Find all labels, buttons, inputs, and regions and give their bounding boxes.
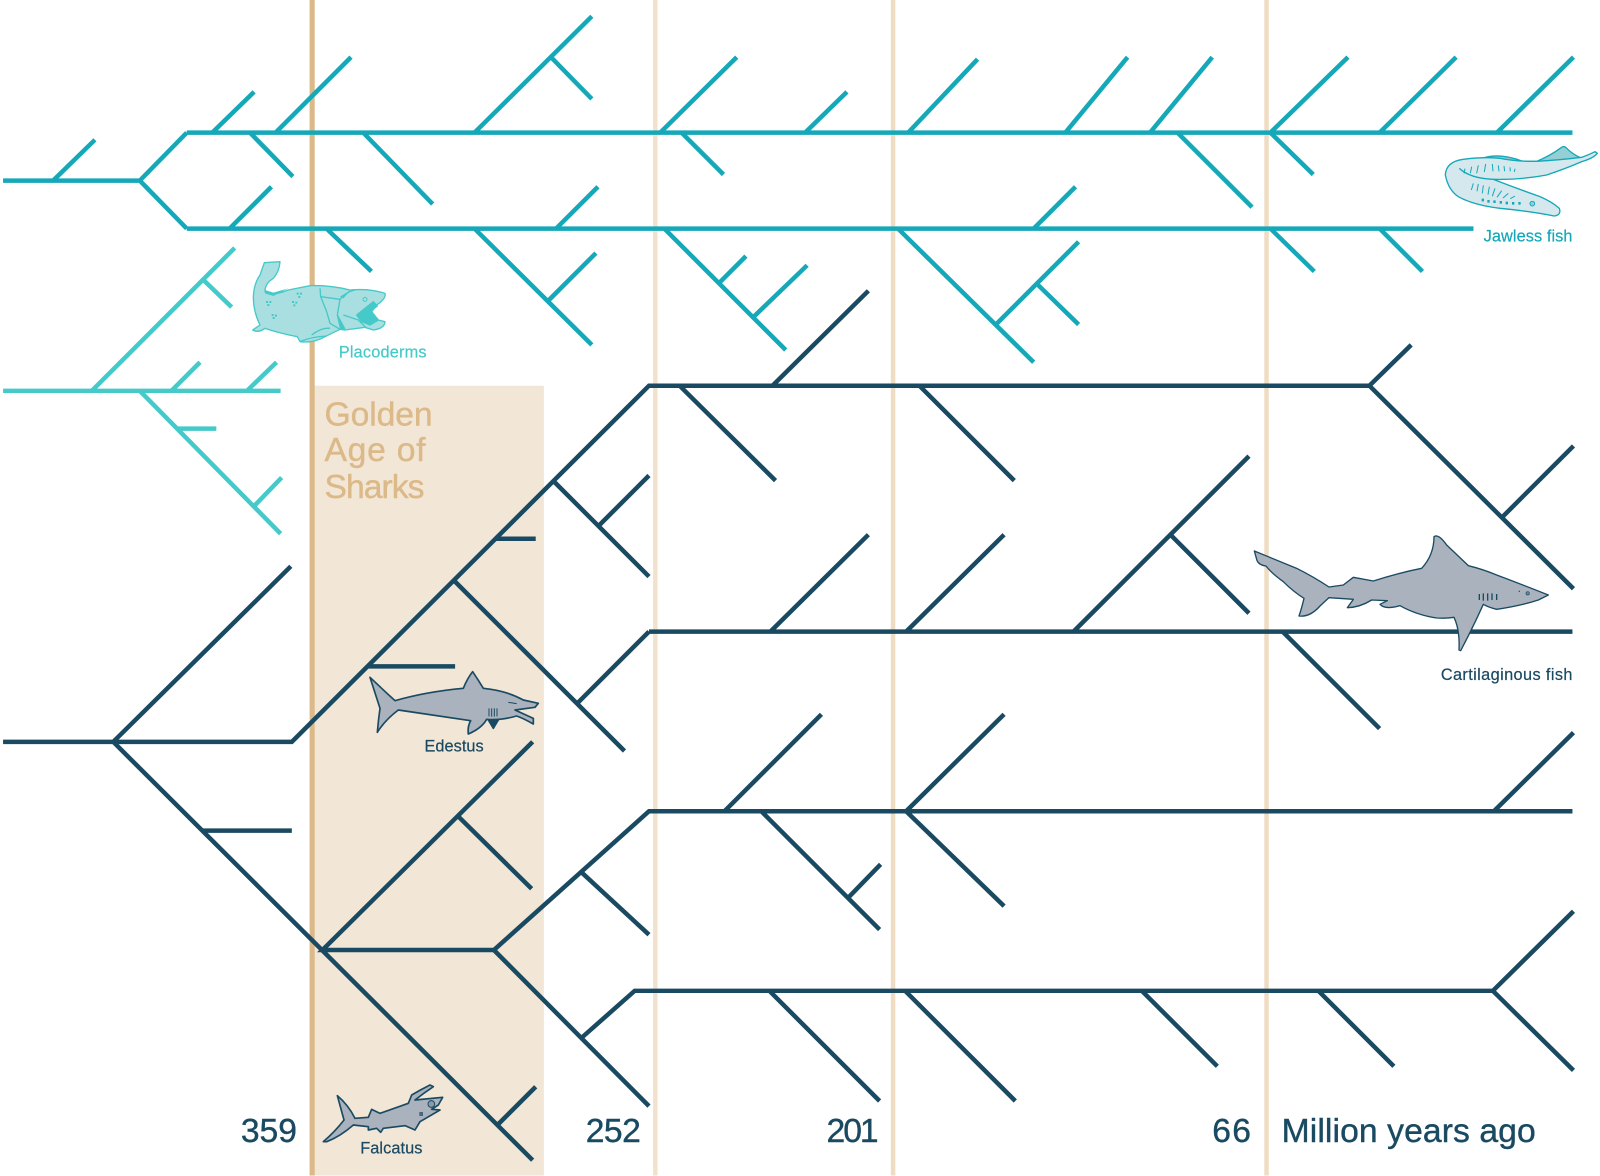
timeline labels xyxy=(241,1113,1536,1150)
species labels: Jawless fish xyxy=(1484,227,1572,245)
tree: placoderm lineage xyxy=(3,248,282,534)
tree: cartilaginous fish lineage xyxy=(3,291,1573,1160)
timeline labels: Million years ago xyxy=(1282,1113,1536,1150)
heading: Golden Age of Sharks: Sharks xyxy=(324,469,424,506)
icon: lamprey (jawless fish) xyxy=(1445,147,1597,216)
species labels xyxy=(339,227,1572,1158)
time marker: 201 million years xyxy=(891,0,895,1176)
heading: Golden Age of Sharks: Golden xyxy=(324,397,433,434)
heading: Golden Age of Sharks: Age of xyxy=(324,432,426,469)
time marker: 252 million years xyxy=(653,0,658,1176)
species labels: Edestus xyxy=(424,738,484,756)
time marker: 66 million years xyxy=(1264,0,1269,1176)
timeline labels: 252 xyxy=(586,1113,641,1150)
icon: Edestus shark xyxy=(370,672,538,734)
timeline labels: 359 xyxy=(241,1113,297,1150)
time marker: 359 million years xyxy=(310,0,315,1176)
icon: Falcatus shark xyxy=(323,1085,443,1142)
heading: Golden Age of Sharks xyxy=(324,397,433,506)
timeline labels: 66 xyxy=(1212,1113,1251,1150)
species labels: Placoderms xyxy=(339,344,427,362)
panel: golden age of sharks band xyxy=(312,386,544,1176)
tree: jawless fish lineage xyxy=(3,16,1573,362)
icon: modern shark (cartilaginous fish) xyxy=(1254,536,1548,651)
icon: placoderm (Dunkleosteus) xyxy=(253,262,385,342)
timeline labels: 201 xyxy=(827,1113,879,1150)
species labels: Cartilaginous fish xyxy=(1441,666,1572,684)
species labels: Falcatus xyxy=(360,1140,422,1158)
